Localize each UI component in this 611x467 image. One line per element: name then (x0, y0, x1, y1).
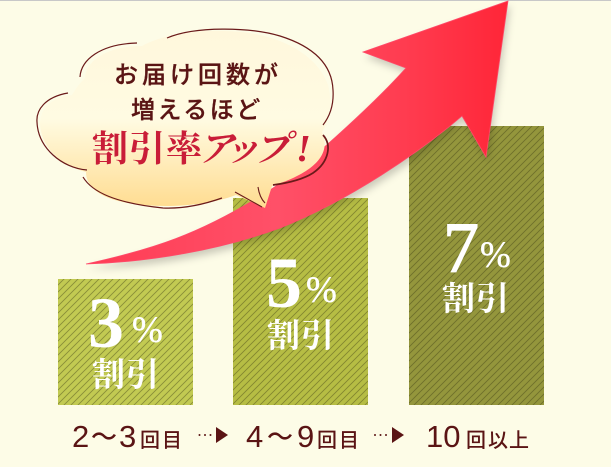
label: 10 or more deliveries: 回 (466, 430, 486, 452)
bubble text: second line: 増えるほど (131, 97, 263, 124)
bar: 7% discount: 7 (443, 208, 479, 288)
rising arrow (86, 1, 510, 269)
speech bubble (37, 29, 333, 208)
label: 10 or more deliveries: 10 (426, 419, 460, 454)
label: 2 to 3 deliveries: 目 (162, 430, 182, 452)
step arrow 1 (198, 427, 228, 443)
bar: 3% discount: 割引 (91, 357, 160, 394)
bubble text: headline: 割 (91, 129, 128, 169)
bar: 5% discount: 5 (266, 243, 302, 323)
bar: 3% discount (58, 279, 193, 405)
bubble text: headline: 引 (129, 129, 165, 169)
bubble text: headline: ッ (224, 129, 260, 169)
bubble text: headline: プ (254, 129, 298, 169)
label: 10 or more deliveries: 上 (509, 429, 529, 452)
bar: 3% discount: 3 (88, 283, 124, 363)
bar: 5% discount: 割引 (266, 318, 335, 355)
bubble text: first line: お届け回数が (114, 62, 282, 89)
label: 2 to 3 deliveries: 2 (72, 419, 89, 454)
label: 2 to 3 deliveries: ～ (91, 422, 117, 452)
bar: 7% discount: 割引 (441, 281, 510, 318)
bar: 5% discount (233, 198, 368, 405)
label: 10 or more deliveries: 以 (488, 430, 508, 452)
bubble text: headline: ! (296, 128, 311, 170)
label: 4 to 9 deliveries: 9 (297, 419, 314, 454)
bar: 7% discount (409, 126, 544, 405)
label: 2 to 3 deliveries: 回 (140, 430, 160, 452)
label: 4 to 9 deliveries: 目 (339, 430, 359, 452)
label: 4 to 9 deliveries: ～ (267, 422, 293, 452)
label: 4 to 9 deliveries: 回 (317, 430, 337, 452)
bubble text: headline: 率 (166, 129, 203, 169)
label: 2 to 3 deliveries: 3 (119, 419, 136, 454)
bar: 3% discount: % (132, 310, 163, 351)
bubble text: headline: ア (198, 129, 237, 169)
step arrow 2 (374, 427, 404, 443)
bar: 5% discount: % (306, 270, 337, 311)
label: 4 to 9 deliveries: 4 (246, 419, 263, 454)
bar: 7% discount: % (480, 235, 511, 276)
